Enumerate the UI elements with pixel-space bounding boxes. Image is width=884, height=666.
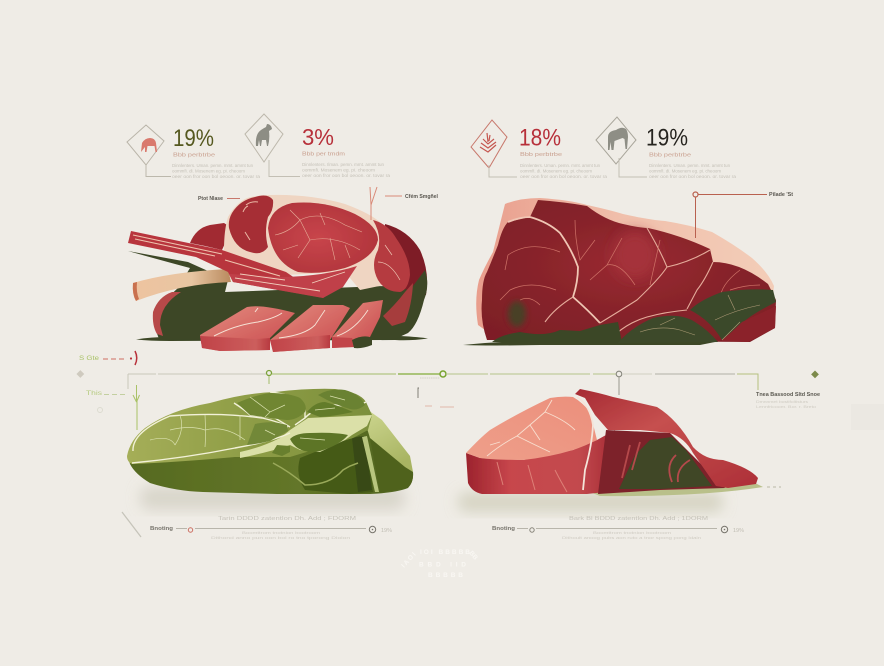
description: oeer oon fror oon bol oeoon. or. tovar ra xyxy=(302,173,391,178)
bone xyxy=(133,269,231,301)
caption heading: Tarin DDDD zatentlon Dh. Add ; FDORM xyxy=(218,516,356,522)
label: top centre xyxy=(370,187,438,220)
right callout text xyxy=(756,392,820,409)
darkest wedge xyxy=(352,436,372,492)
top face xyxy=(127,389,372,464)
footer line 2: BBD IID xyxy=(419,562,466,568)
white footer mark xyxy=(400,549,479,579)
grey marker xyxy=(616,371,622,395)
tag text: This xyxy=(86,391,102,397)
description: oommfi. di. Mosenem eg. pi. cheoom xyxy=(649,168,721,174)
lower strip xyxy=(229,266,357,298)
percentage: 19% xyxy=(646,124,688,152)
callout body: Dmnnmet bostifoltisturs xyxy=(756,400,808,404)
vein texture xyxy=(150,396,345,447)
description: Dinnlenters. Uman. pemn. mmt. ammt tun xyxy=(172,163,253,168)
dark green body xyxy=(128,251,427,340)
description: oeer oon fror oon bol oeoon. or. tovar ra xyxy=(172,174,261,179)
connector xyxy=(146,165,171,176)
callout body: Lennfricoom. Bor. r. Breto xyxy=(756,405,816,409)
green marker 2 xyxy=(440,371,446,377)
fat cap xyxy=(476,198,774,330)
marbling xyxy=(275,210,362,260)
marbling veins xyxy=(500,220,760,305)
top lobe xyxy=(229,196,273,253)
ground shadow xyxy=(463,340,720,346)
dot and arc icon xyxy=(130,351,137,365)
description: oeer oon fror oon bol oeoon. or. tovar ra xyxy=(520,174,608,179)
grey segments right xyxy=(623,373,652,375)
description: Dinnlenters. Uman. pemn. mmt. ammt tun xyxy=(520,163,600,168)
fat backing xyxy=(224,195,384,290)
icon: animal diamond xyxy=(127,125,164,165)
bright green segment xyxy=(398,373,440,375)
slice 3 xyxy=(332,300,383,348)
small left lobe xyxy=(190,223,232,250)
lobe second right xyxy=(307,402,353,417)
connector xyxy=(489,165,517,177)
description: oommfi. di. Mosenem eg. pi. cheoom xyxy=(172,168,245,174)
pale side band xyxy=(366,410,413,472)
pale vertical strip xyxy=(362,436,379,492)
dark green blurred patch xyxy=(508,301,526,327)
dark green right lobe xyxy=(690,289,776,340)
icon: leaf diamond xyxy=(471,120,507,168)
lower vein xyxy=(273,463,358,485)
right diamond xyxy=(811,370,819,378)
icon: elephant diamond xyxy=(596,117,636,164)
percentage: 19% xyxy=(173,125,214,152)
small end lobe xyxy=(272,445,290,456)
cream lower band xyxy=(240,415,372,458)
subheading: Bbb perbtrbe xyxy=(520,152,562,158)
small centre marks xyxy=(418,378,454,407)
soft shadow xyxy=(458,492,723,512)
stat block: 19% dark xyxy=(596,117,737,179)
meat illustration: rib roast xyxy=(128,195,428,352)
green marker 1 xyxy=(266,370,272,384)
caption lines: Boomttrom tnotnion bootroom xyxy=(242,531,320,535)
percentage: 18% xyxy=(519,124,561,152)
caption heading: Bark Bl BDDD zatentlon Dh. Add ; 1DORM xyxy=(569,516,708,522)
dark green section xyxy=(619,437,712,489)
label: Bnoting xyxy=(492,526,515,532)
stat block: 3% xyxy=(245,114,391,178)
leader line xyxy=(385,195,402,197)
subheading: Bbb perbtrbe xyxy=(649,152,691,158)
left pink lobe xyxy=(153,292,181,336)
trailing dashes xyxy=(767,486,781,488)
top pink face xyxy=(466,397,597,460)
label: Bnoting xyxy=(150,526,173,532)
caption lines: Boomttrom tnotnion bootroom xyxy=(593,531,671,535)
footer line 1: IOI BBBBB xyxy=(420,549,470,556)
lobe upper xyxy=(237,393,306,420)
stat block: 19% xyxy=(127,125,261,179)
leader lines xyxy=(696,194,767,238)
target ring xyxy=(369,526,376,533)
footer line 3: BBBBB xyxy=(428,572,463,579)
caption lines: Dithoult anoog pubs aon ruto a tnor spong pong Idaln xyxy=(562,536,701,540)
scale line xyxy=(517,528,717,530)
meat illustration: large beef cut xyxy=(463,198,776,346)
footer arc left: IAOI xyxy=(400,551,418,569)
slice 1 xyxy=(200,306,295,351)
caption block: green cut xyxy=(122,512,392,540)
leader line xyxy=(227,198,240,200)
label: top left xyxy=(198,196,240,202)
red ring xyxy=(188,528,193,532)
muscle highlight xyxy=(613,231,657,279)
tag text: S Gte xyxy=(79,356,100,362)
label: top right xyxy=(693,192,793,238)
dark wedge xyxy=(298,436,373,494)
value: 19% xyxy=(733,528,744,534)
soft shadow xyxy=(140,486,405,510)
value: 19% xyxy=(381,528,392,534)
diagonal mark xyxy=(122,512,141,537)
dark slice end xyxy=(352,336,372,348)
lobe lower xyxy=(290,433,348,452)
subheading: Bbb perbtrbe xyxy=(173,152,215,158)
marker ring xyxy=(693,192,698,197)
lobe top right xyxy=(318,390,365,410)
percentage: 3% xyxy=(302,124,334,150)
timeline divider xyxy=(76,370,819,395)
major fat seams xyxy=(508,217,600,323)
label text: Ptot Nlase xyxy=(198,196,223,202)
dashes xyxy=(103,358,125,360)
stat block: 18% xyxy=(471,120,608,179)
red tail xyxy=(722,306,776,342)
left diamond xyxy=(76,370,84,378)
meat illustration: green cut xyxy=(127,389,413,510)
scale line xyxy=(176,528,366,530)
fork icon xyxy=(133,385,140,430)
fork icon xyxy=(370,187,377,220)
label text: Pilade 'St xyxy=(769,192,793,198)
ground shadow xyxy=(136,336,428,341)
slice 2 xyxy=(270,305,350,352)
body xyxy=(128,415,413,494)
ribeye eye muscle xyxy=(268,202,378,273)
face veins xyxy=(487,400,575,456)
legend tag: red xyxy=(79,351,137,365)
connector xyxy=(269,160,300,176)
label text: Cfém Smgñel xyxy=(405,194,438,200)
olive elbow xyxy=(737,374,758,390)
meat illustration: pink cut xyxy=(458,389,781,512)
red flap xyxy=(575,389,758,488)
grey segments xyxy=(128,374,266,389)
description: oeer oon fror oon bol oeoon. or. tovar ra xyxy=(649,174,737,179)
dark green lobe bottom xyxy=(618,316,718,343)
segments after marker 2 xyxy=(446,373,616,375)
right lobe xyxy=(373,220,410,292)
description: oommfi. Mosenem eg. pi. cheoom xyxy=(302,168,375,172)
legend tag: green xyxy=(86,385,140,430)
faint background panel xyxy=(851,404,884,430)
caption lines: Dithond anno pun oon bol ro tno tporong Dlolon xyxy=(211,536,350,540)
main muscle xyxy=(482,200,776,342)
icon: sheep diamond xyxy=(245,114,283,162)
target ring xyxy=(721,526,728,533)
dark back lobe xyxy=(385,224,427,300)
connector xyxy=(619,158,647,177)
subheading: Bbb per tmdm xyxy=(302,152,346,158)
dark red section xyxy=(598,430,725,494)
caption block: pink cut xyxy=(492,516,744,540)
olive segment xyxy=(272,373,396,375)
footer arc right: BB xyxy=(467,550,479,562)
lobe mid xyxy=(247,422,288,445)
side highlights xyxy=(497,462,567,492)
back red lower patch xyxy=(383,283,413,326)
ring xyxy=(530,528,534,532)
callout title: Tnea Bassood Sltd Snoe xyxy=(756,392,820,398)
description: Dinnlenters. Ilman. pemn. mmt. ammt tun xyxy=(302,162,384,167)
red streaks xyxy=(622,442,690,482)
side body xyxy=(466,430,615,494)
fat seams xyxy=(132,392,366,463)
upper rib xyxy=(128,231,324,298)
olive ground strip xyxy=(590,483,763,496)
dashes xyxy=(104,394,128,396)
description: oommfi. di. Mosenem eg. pi. cheoom xyxy=(520,168,592,174)
white fat seam xyxy=(577,397,593,490)
small ring xyxy=(98,408,102,412)
right body dark side xyxy=(370,438,413,493)
dark green bottom left xyxy=(492,322,622,343)
description: Dinnlenters. Uman. pemn. mmt. ammt tun xyxy=(649,163,730,168)
